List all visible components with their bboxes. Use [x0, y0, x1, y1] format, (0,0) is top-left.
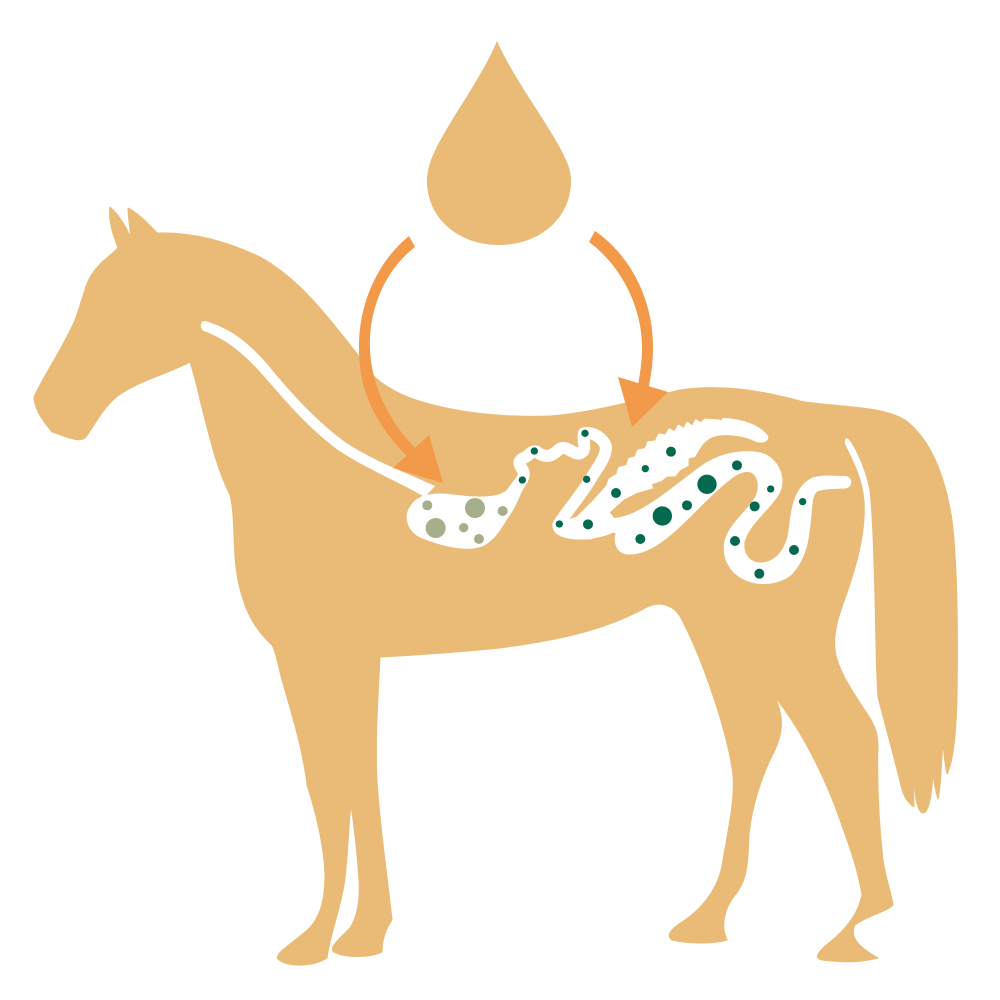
- large colon: [601, 452, 850, 583]
- water drop: [427, 41, 571, 245]
- small intestine join: [558, 497, 616, 539]
- esophagus: [201, 321, 435, 497]
- digestive tract: [407, 419, 850, 583]
- stomach: [407, 475, 528, 549]
- microbes: stomach: [422, 498, 508, 544]
- arrow: drop to stomach: [359, 236, 443, 483]
- cecum: [593, 419, 767, 517]
- horse silhouette: [34, 207, 957, 965]
- microbes: intestines: [519, 430, 806, 579]
- small intestine: [517, 433, 606, 534]
- arrow: drop to intestines: [589, 231, 668, 427]
